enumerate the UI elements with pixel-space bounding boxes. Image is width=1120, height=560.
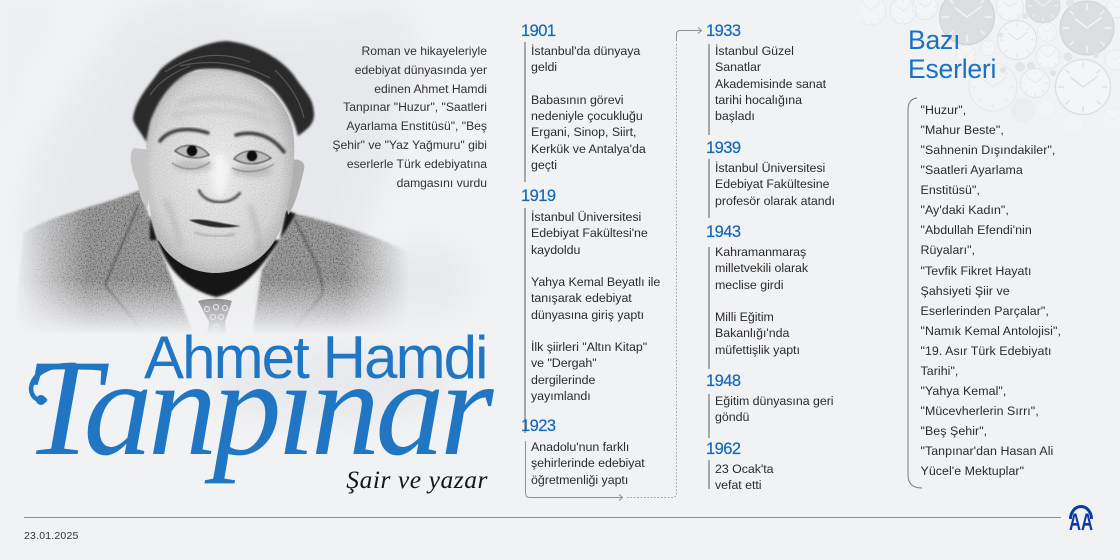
works list: "Ay'daki Kadın", bbox=[920, 203, 1009, 217]
entry 1933: Sanatlar bbox=[715, 60, 761, 74]
ears bbox=[131, 148, 152, 207]
entry 1943: meclise girdi bbox=[715, 278, 783, 292]
entry 1948: Eğitim dünyasına geri bbox=[715, 394, 834, 408]
entry 1943: müfettişlik yaptı bbox=[715, 342, 800, 356]
entry 1933 bbox=[715, 44, 826, 123]
works list: Tarihi", bbox=[920, 364, 958, 378]
entry 1901: Babasının görevi bbox=[531, 93, 624, 107]
entry 1962: vefat etti bbox=[715, 478, 762, 492]
works heading bbox=[908, 25, 996, 84]
works bracket bbox=[908, 98, 922, 488]
portrait photo bbox=[18, 39, 406, 332]
works list: "Tevfik Fikret Hayatı bbox=[920, 264, 1032, 278]
neck shadow bbox=[150, 210, 296, 297]
entry 1919: dünyasına giriş yaptı bbox=[531, 308, 644, 322]
works list: "Yahya Kemal", bbox=[920, 384, 1006, 398]
entry 1901: geçti bbox=[531, 158, 557, 172]
entry 1933: Akademisinde sanat bbox=[715, 76, 826, 90]
entry 1923: öğretmenliği yaptı bbox=[531, 472, 628, 486]
subtitle: Şair ve yazar bbox=[346, 465, 488, 494]
works list: "Namık Kemal Antolojisi", bbox=[920, 324, 1061, 338]
year 1933: 1933 bbox=[706, 22, 741, 40]
entry 1943: milletvekili olarak bbox=[715, 261, 808, 275]
works list bbox=[920, 103, 1061, 478]
works heading: Bazı bbox=[908, 25, 960, 55]
works list: Yücel'e Mektuplar" bbox=[920, 464, 1024, 478]
entry 1923 bbox=[531, 440, 645, 486]
intro text: eserlerle Türk edebiyatına bbox=[347, 157, 487, 171]
year 1943: 1943 bbox=[706, 223, 741, 241]
shirt bbox=[166, 260, 257, 291]
entry 1901 bbox=[531, 44, 646, 172]
works list: "Mücevherlerin Sırrı", bbox=[920, 404, 1039, 418]
intro text: Şehir" ve "Yaz Yağmuru" gibi bbox=[332, 138, 487, 152]
intro text: edebiyat dünyasında yer bbox=[355, 63, 487, 77]
date: 23.01.2025 bbox=[24, 530, 79, 542]
entry 1919: ve "Dergah" bbox=[531, 356, 597, 370]
entry 1939: Edebiyat Fakültesine bbox=[715, 177, 829, 191]
entry 1919: İstanbul Üniversitesi bbox=[531, 210, 641, 224]
entry 1919: dergilerinde bbox=[531, 372, 595, 386]
face bbox=[146, 70, 294, 273]
decorative clocks bbox=[860, 0, 1120, 129]
intro text: Ayarlama Enstitüsü", "Beş bbox=[346, 119, 487, 133]
entry 1962 bbox=[715, 462, 774, 492]
works list: "Tanpınar'dan Hasan Ali bbox=[920, 444, 1053, 458]
works list: "19. Asır Türk Edebiyatı bbox=[920, 344, 1051, 358]
entry 1933: başladı bbox=[715, 109, 755, 123]
entry 1962: 23 Ocak'ta bbox=[715, 462, 774, 476]
entry 1943: Bakanlığı'nda bbox=[715, 326, 789, 340]
entry 1933: İstanbul Güzel bbox=[715, 44, 794, 58]
eyes bbox=[172, 145, 274, 171]
entry 1919 bbox=[531, 210, 660, 403]
works list: "Sahnenin Dışındakiler", bbox=[920, 143, 1055, 157]
intro text: Tanpınar "Huzur", "Saatleri bbox=[343, 100, 487, 114]
nose bbox=[199, 190, 240, 202]
connector arrow between columns bbox=[525, 27, 702, 501]
entry 1939 bbox=[715, 161, 835, 208]
entry 1901: geldi bbox=[531, 60, 557, 74]
works heading: Eserleri bbox=[908, 54, 996, 84]
intro text bbox=[332, 44, 487, 190]
year 1948: 1948 bbox=[706, 372, 741, 390]
year 1901: 1901 bbox=[521, 22, 556, 40]
intro text: damgasını vurdu bbox=[397, 176, 487, 190]
works list: Şahsiyeti Şiir ve bbox=[920, 284, 1010, 298]
works list: "Huzur", bbox=[920, 103, 966, 117]
entry 1933: tarihi hocalığına bbox=[715, 93, 802, 107]
works list: "Abdullah Efendi'nin bbox=[920, 223, 1032, 237]
year 1939: 1939 bbox=[706, 139, 741, 157]
timeline column two bbox=[706, 22, 835, 492]
entry 1948: göndü bbox=[715, 410, 749, 424]
face shading bbox=[165, 98, 272, 250]
works list: "Beş Şehir", bbox=[920, 424, 987, 438]
works list: "Mahur Beste", bbox=[920, 123, 1004, 137]
entry 1919: tanışarak edebiyat bbox=[531, 291, 632, 305]
entry 1919: Edebiyat Fakültesi'ne bbox=[531, 226, 648, 240]
entry 1919: İlk şiirleri "Altın Kitap" bbox=[531, 340, 647, 354]
hair bbox=[133, 41, 314, 142]
entry 1901: nedeniyle çocukluğu bbox=[531, 109, 643, 123]
title: Tanpınar: Tanpınar bbox=[24, 330, 489, 484]
entry 1943: Milli Eğitim bbox=[715, 310, 774, 324]
intro text: Roman ve hikayeleriyle bbox=[361, 44, 487, 58]
year 1962: 1962 bbox=[706, 440, 741, 458]
entry 1919: yayımlandı bbox=[531, 389, 591, 403]
jacket bbox=[18, 190, 406, 332]
entry 1923: şehirlerinde edebiyat bbox=[531, 456, 645, 470]
intro text: edinen Ahmet Hamdi bbox=[374, 82, 487, 96]
entry 1943 bbox=[715, 245, 808, 356]
eyebrows bbox=[160, 129, 284, 152]
tie bbox=[198, 298, 232, 332]
works list: Rüyaları", bbox=[920, 243, 975, 257]
mouth bbox=[189, 220, 241, 228]
entry 1939: profesör olarak atandı bbox=[715, 194, 835, 208]
works list: Eserlerinden Parçalar", bbox=[920, 304, 1049, 318]
entry 1943: Kahramanmaraş bbox=[715, 245, 806, 259]
entry 1923: Anadolu'nun farklı bbox=[531, 440, 629, 454]
title: Ahmet Hamdi: Ahmet Hamdi bbox=[144, 324, 487, 391]
footer rule bbox=[24, 517, 1061, 518]
entry 1939: İstanbul Üniversitesi bbox=[715, 161, 825, 175]
works list: Enstitüsü", bbox=[920, 183, 980, 197]
entry 1919: Yahya Kemal Beyatlı ile bbox=[531, 275, 660, 289]
entry 1901: İstanbul'da dünyaya bbox=[531, 44, 640, 58]
timeline column one bbox=[521, 22, 660, 486]
works list: "Saatleri Ayarlama bbox=[920, 163, 1023, 177]
title swash on T bbox=[28, 362, 77, 405]
entry 1919: kaydoldu bbox=[531, 242, 580, 256]
entry 1948 bbox=[715, 394, 834, 424]
year 1919: 1919 bbox=[521, 187, 556, 205]
entry 1901: Kerkük ve Antalya'da bbox=[531, 142, 646, 156]
year 1923: 1923 bbox=[521, 417, 556, 435]
entry 1901: Ergani, Sinop, Siirt, bbox=[531, 125, 636, 139]
